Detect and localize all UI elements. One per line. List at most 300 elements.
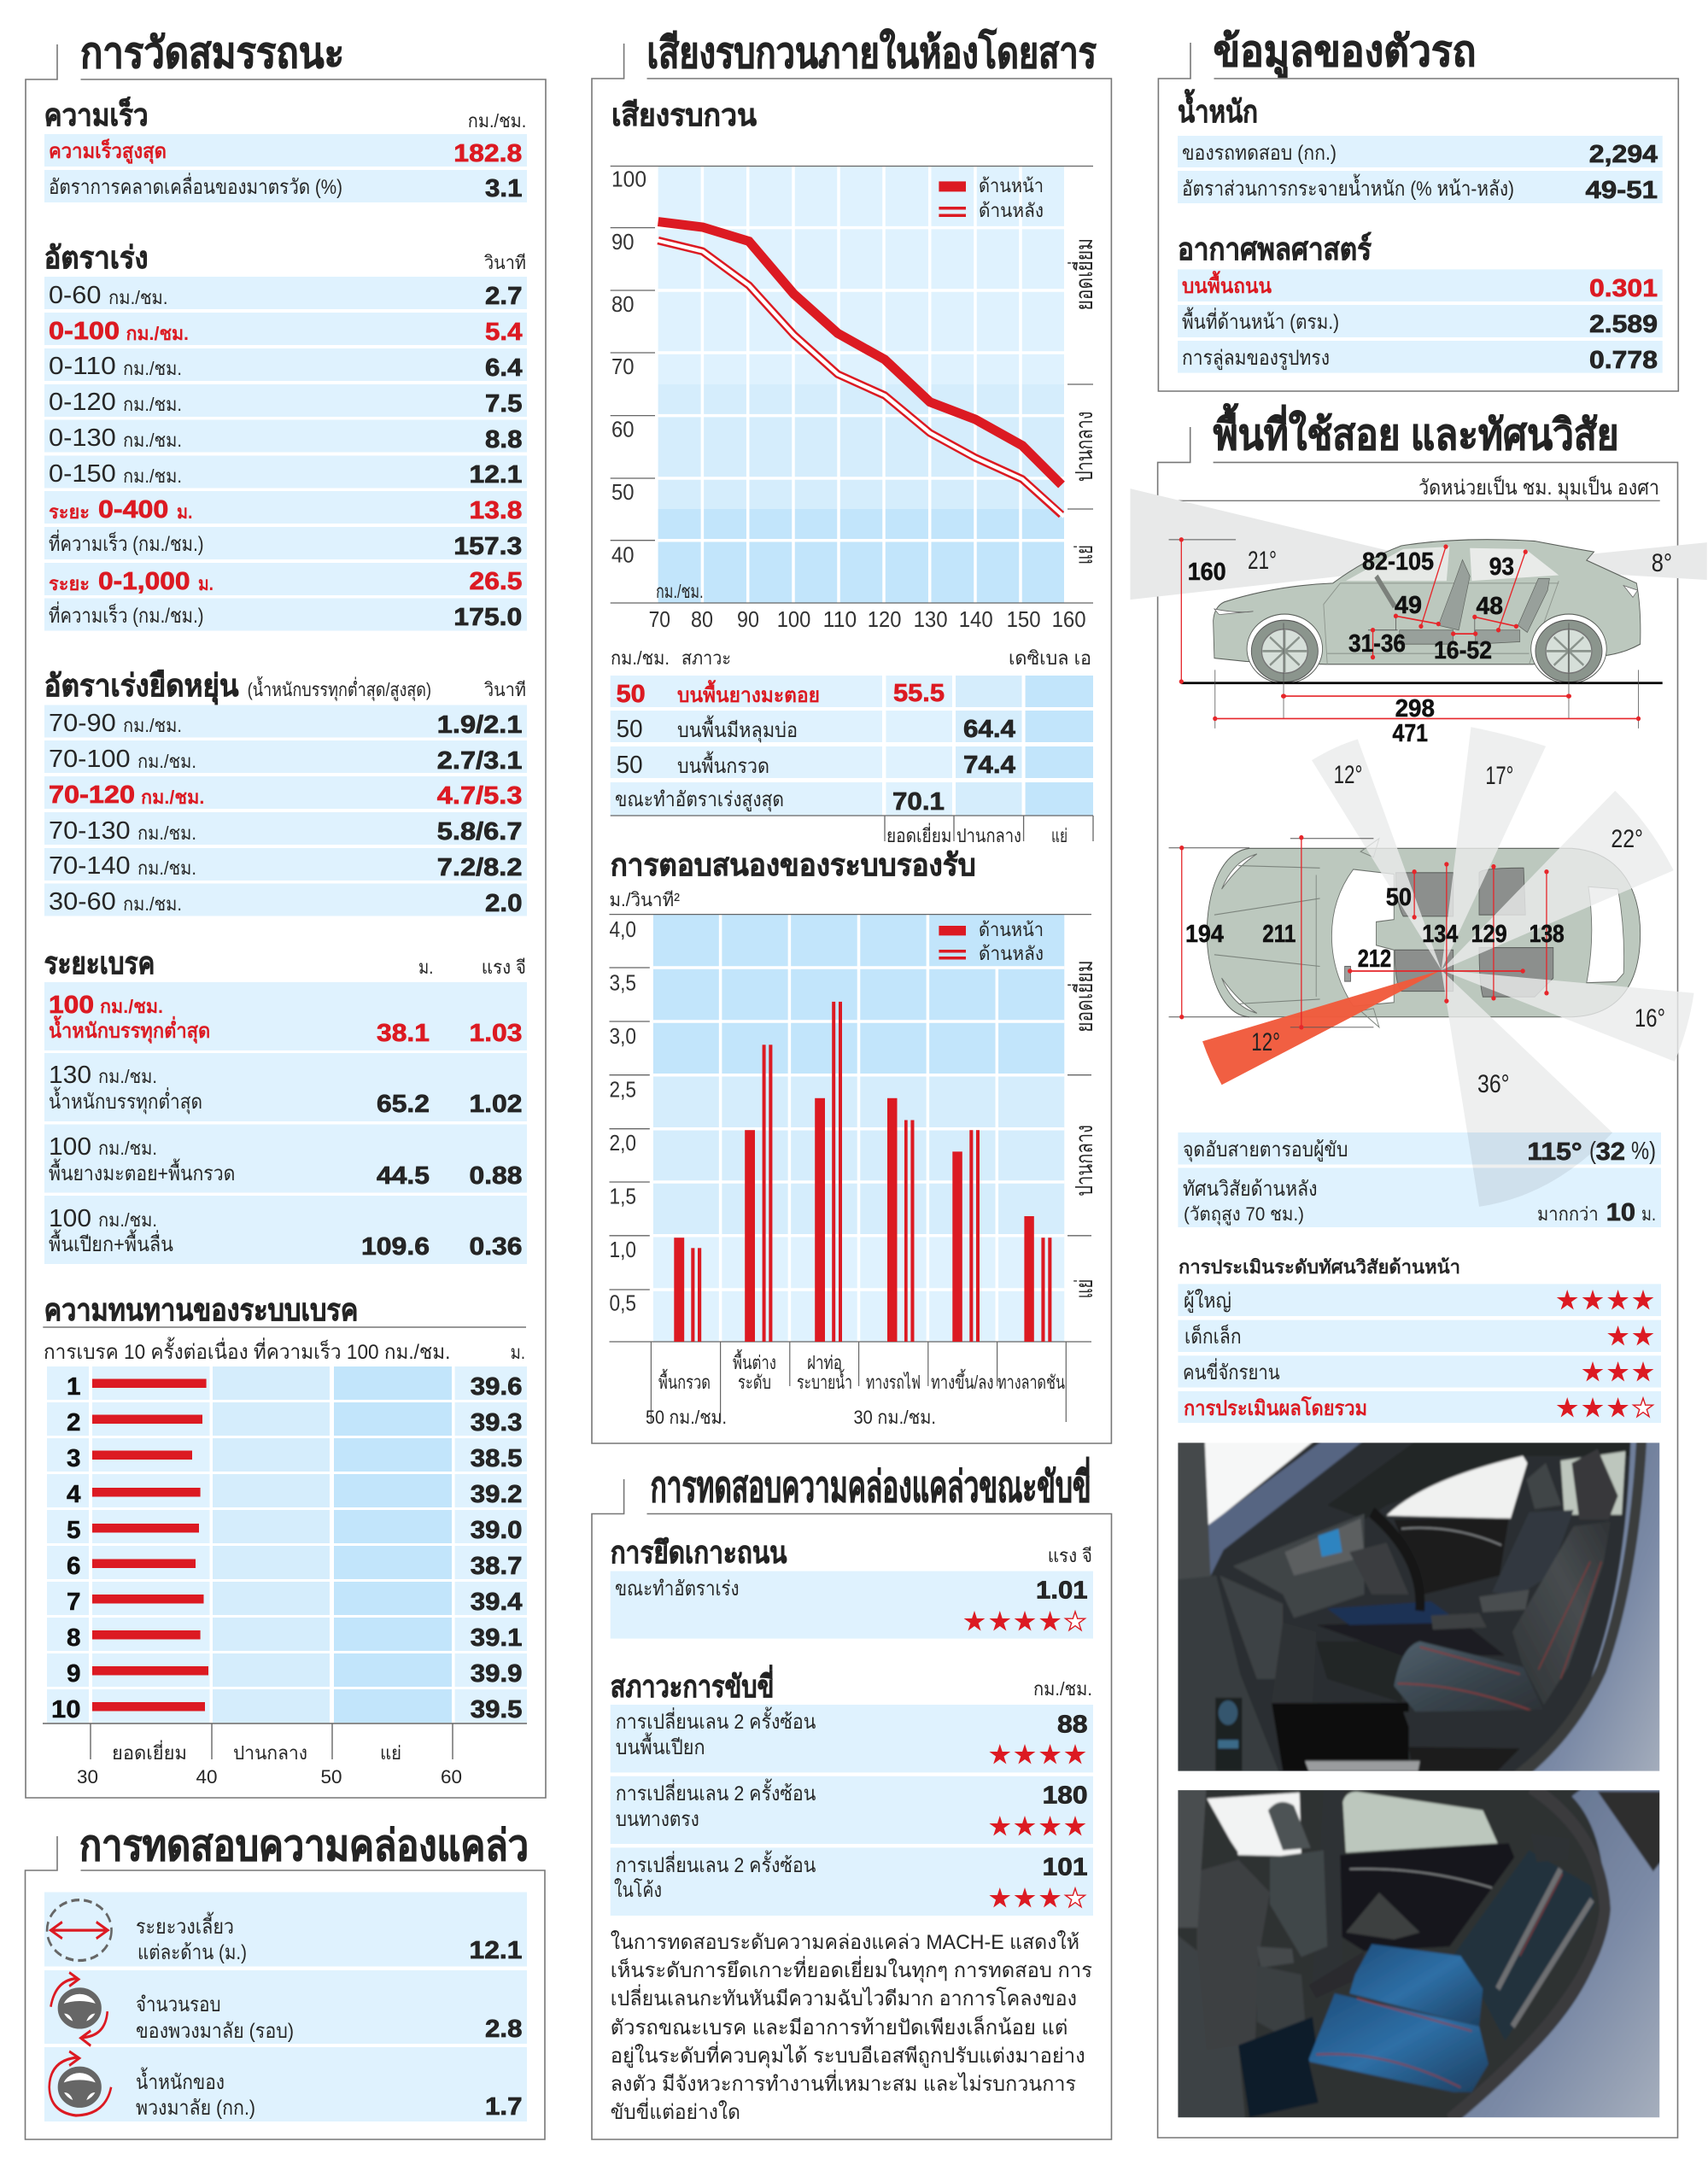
row 1: 1	[67, 1373, 80, 1401]
dimension labels top: 12°	[1334, 761, 1362, 789]
dimension lines top	[1169, 838, 1547, 1027]
x axis labels: กม./ชม.	[656, 581, 704, 602]
dimension labels top: 134	[1422, 921, 1458, 948]
row: test car weight	[1178, 136, 1663, 168]
row: 0-100	[44, 313, 527, 346]
section: flexible acceleration	[44, 668, 527, 917]
row: 100 km/h wet and slippery: กม./ชม.	[98, 1209, 157, 1231]
panel: cabin space and visibility	[1130, 403, 1707, 2138]
y axis labels: 0,5	[610, 1290, 636, 1315]
row: 0-150: 12.1	[470, 461, 523, 489]
rating axis: ยอดเยี่ยม	[886, 822, 951, 846]
row: 30-60: กม./ชม.	[123, 893, 182, 915]
row: blind spot: 115°	[1527, 1138, 1582, 1166]
dimension labels side: 21°	[1248, 547, 1277, 575]
chart axis: 40	[196, 1766, 217, 1788]
row: 100 km/h min load: กม./ชม.	[100, 996, 163, 1017]
y axis labels: 100	[611, 166, 646, 191]
row 10: 10	[51, 1696, 80, 1723]
row: 70-90: 1.9/2.1	[437, 711, 523, 739]
row 2: 2	[67, 1409, 80, 1437]
row: on road: 0.301	[1589, 275, 1658, 302]
icon: steering wheel weight	[50, 2051, 111, 2115]
row: 0-130: กม./ชม.	[123, 430, 182, 451]
dimension dots top	[1179, 835, 1549, 1030]
paragraph: handling summary: ในการทดสอบระดับความคล่องแคล่ว MACH-E แสดงให้	[611, 1930, 1079, 1954]
photo: rear seats	[1178, 1790, 1660, 2118]
heading: front visibility rating: การประเมินระดับทัศนวิสัยด้านหน้า	[1179, 1256, 1460, 1278]
row: 100 km/h wet and slippery	[44, 1196, 527, 1264]
y axis labels: 60	[611, 417, 634, 442]
panel frame	[592, 44, 1111, 1443]
dimension labels side: 49	[1395, 592, 1422, 619]
paragraph: handling summary: ขับขี่แต่อย่างใด	[611, 2098, 740, 2124]
row: 0-1000 m: 26.5	[470, 568, 523, 595]
dimension labels top: 17°	[1485, 762, 1513, 790]
x axis labels: 120	[868, 606, 901, 632]
row: potholes: บนพื้นมีหลุมบ่อ	[677, 715, 798, 743]
x axis categories: 30 กม./ชม.	[854, 1407, 936, 1428]
row: gravel: 50	[617, 752, 643, 779]
row: 70-90: 70-90	[49, 710, 116, 737]
row: full acceleration	[611, 782, 1093, 816]
icon: steering wheel turns	[50, 1972, 108, 2045]
heading: speed: ความเร็ว	[44, 96, 149, 132]
y axis labels	[610, 916, 636, 1315]
row: speed at 400 m	[44, 527, 527, 560]
title: performance: การวัดสมรรถนะ	[80, 29, 344, 77]
row 5: 39.0	[471, 1517, 523, 1544]
dimension labels top: 22°	[1611, 825, 1643, 853]
rating axis	[611, 816, 1093, 846]
row: steering weight: น้ำหนักของ	[136, 2067, 225, 2094]
row 7: 39.4	[471, 1589, 523, 1616]
heading: weight: น้ำหนัก	[1178, 89, 1258, 129]
row: lane change wet	[611, 1705, 1093, 1772]
row: test car weight: 2,294	[1589, 141, 1658, 168]
row: weight distribution	[1178, 171, 1663, 204]
row: 100 km/h min load: 1.03	[470, 1020, 523, 1047]
row: lane change bend: 101	[1043, 1853, 1088, 1881]
row: turning circle: ระยะวงเลี้ยว	[136, 1911, 234, 1939]
paragraph: handling summary: ตัวรถขณะเบรค และมีอาการท้ายปัดเพียงเล็กน้อย แต่	[611, 2015, 1068, 2039]
x axis categories: ทางขึ้น/ลง	[931, 1369, 993, 1393]
sight wedges top	[1312, 727, 1694, 1207]
row: rear visibility	[1183, 1178, 1656, 1226]
row: asphalt: 55.5	[893, 680, 945, 707]
legend: ด้านหน้า	[979, 175, 1044, 196]
row: top speed: ความเร็วสูงสุด	[49, 138, 167, 165]
bars: ramp	[1024, 1216, 1051, 1342]
sight wedges side	[1130, 489, 1707, 600]
chart axis: แย่	[380, 1742, 401, 1764]
x axis categories: พื้นต่าง	[733, 1349, 776, 1373]
title: handling test: การทดสอบความคล่องแคล่วขณะขับขี่	[651, 1457, 1091, 1511]
unit: g force: แรง จี	[1048, 1545, 1092, 1566]
row: lane change straight	[611, 1776, 1093, 1844]
row 10	[47, 1689, 527, 1723]
row: 100 km/h wet and slippery: 0.36	[470, 1233, 523, 1261]
dimension labels side: 93	[1489, 553, 1514, 581]
row: steering weight: พวงมาลัย (กก.)	[136, 2097, 255, 2120]
row: 70-130	[44, 812, 527, 846]
row: 0-120: 0-120	[49, 389, 116, 416]
x axis labels: 150	[1007, 606, 1041, 632]
bar chart: suspension response	[610, 915, 1097, 1428]
x axis labels: 160	[1052, 606, 1086, 632]
chart axis: ปานกลาง	[233, 1742, 307, 1764]
row: 0-1000 m: 0-1,000	[98, 568, 190, 595]
rating labels: แย่	[1071, 545, 1097, 565]
table header: สภาวะ	[681, 647, 731, 669]
paragraph: handling summary	[611, 1930, 1092, 2124]
row: 0-1000 m	[44, 563, 527, 595]
row: 0-120: กม./ชม.	[123, 394, 182, 415]
panel frame	[1158, 427, 1677, 2138]
panel: performance measurements	[26, 29, 546, 1798]
row: 70-140: 7.2/8.2	[437, 854, 523, 881]
panel frame	[26, 44, 546, 1798]
x axis categories: ฝาท่อ	[807, 1352, 842, 1373]
panel: vehicle data	[1158, 27, 1678, 391]
dimension labels side: 48	[1476, 593, 1503, 620]
row: asphalt: บนพื้นยางมะตอย	[677, 679, 820, 707]
row 1: 39.6	[471, 1373, 523, 1401]
row: 70-100: 2.7/3.1	[437, 747, 523, 775]
row: full acceleration: ขณะทำอัตราเร่งสูงสุด	[615, 788, 784, 812]
x axis categories: ระดับ	[738, 1372, 771, 1393]
row: 100 km/h asphalt and gravel: 44.5	[377, 1162, 430, 1190]
row: 70-100: 70-100	[49, 746, 131, 773]
stars: 4	[1557, 1290, 1653, 1310]
row: drag shape: การลู่ลมของรูปทรง	[1182, 347, 1330, 371]
row: 0-1000 m: ระยะ	[49, 573, 90, 594]
bars: gravel	[674, 1238, 701, 1342]
section: brake endurance chart	[43, 1292, 527, 1788]
section: speed	[44, 96, 527, 202]
row: lane change wet: การเปลี่ยนเลน 2 ครั้งซ้อน	[616, 1706, 816, 1734]
y axis labels: 1,0	[610, 1237, 636, 1262]
x axis categories: พื้นกรวด	[658, 1369, 711, 1393]
row: 100 km/h wet and slippery: 100	[49, 1205, 91, 1232]
row: 30-60	[44, 883, 527, 917]
row 8: 8	[67, 1624, 80, 1652]
chart axis: 60	[441, 1766, 462, 1788]
row: 100 km/h wet and slippery: 109.6	[361, 1233, 430, 1261]
heading: acceleration: อัตราเร่ง	[44, 240, 149, 275]
row 6: 38.7	[471, 1553, 523, 1580]
row 4	[47, 1474, 527, 1508]
row: test car weight: ของรถทดสอบ (กก.)	[1182, 142, 1337, 165]
stars: 3 of 4	[989, 1887, 1085, 1908]
row: rear visibility: (วัตถุสูง 70 ชม.)	[1184, 1203, 1304, 1226]
dimension labels side	[1188, 547, 1672, 747]
x axis labels: 140	[959, 606, 993, 632]
table header: เดซิเบล เอ	[1009, 647, 1091, 669]
row: lane change bend	[611, 1847, 1093, 1916]
row: 0-60: 0-60	[49, 282, 101, 309]
heading: driving conditions: สภาวะการขับขี่	[611, 1665, 774, 1704]
row: drag shape: 0.778	[1589, 347, 1658, 374]
row: 0-400 m	[44, 491, 527, 524]
row 8: 39.1	[471, 1624, 523, 1652]
dimension labels top	[1185, 761, 1665, 1098]
rating labels: แย่	[1071, 1279, 1097, 1298]
legend	[939, 175, 1044, 221]
row: overall	[1178, 1391, 1661, 1423]
dimension labels top: 50	[1386, 884, 1412, 911]
row 4: 4	[67, 1481, 80, 1508]
panel: agility test	[26, 1822, 545, 2139]
section: acceleration	[44, 240, 527, 631]
dimension labels side: 31-36	[1348, 630, 1406, 658]
x axis categories: ทางลาดชัน	[997, 1372, 1065, 1393]
row 3	[47, 1438, 527, 1472]
x axis labels: 100	[777, 606, 810, 632]
heading: aerodynamics: อากาศพลศาสตร์	[1178, 231, 1372, 266]
dimension labels top: 212	[1358, 945, 1391, 973]
y axis labels: 1,5	[610, 1184, 636, 1209]
row 5: 5	[67, 1517, 80, 1544]
row: weight distribution: 49-51	[1585, 177, 1658, 204]
row 9: 39.9	[471, 1660, 523, 1688]
stars: 3 of 4	[1557, 1397, 1652, 1418]
row 5	[47, 1510, 527, 1544]
stars: 4 of 5	[964, 1611, 1085, 1631]
row 1	[47, 1366, 527, 1401]
row 6: 6	[67, 1553, 80, 1580]
row: 100 km/h asphalt and gravel: กม./ชม.	[98, 1138, 157, 1159]
y axis labels: 40	[611, 541, 634, 567]
row: 100 km/h min load: 100	[49, 992, 94, 1019]
series: rear	[656, 240, 1064, 517]
row: asphalt: 50	[617, 681, 646, 708]
row: 70-130: 70-130	[49, 817, 131, 845]
row: 0-130	[44, 420, 527, 454]
panel frame	[26, 1836, 545, 2139]
panel: handling test	[592, 1457, 1112, 2139]
row: 0-110	[44, 348, 527, 382]
row: 0-110: กม./ชม.	[123, 358, 182, 379]
row: blind spot: 32	[1596, 1138, 1625, 1166]
car body side	[1214, 540, 1641, 683]
dimension dots side	[1179, 537, 1641, 721]
row: speedometer error	[44, 170, 527, 202]
rating labels: ยอดเยี่ยม	[1068, 238, 1097, 311]
row: 70-130: 5.8/6.7	[437, 818, 523, 846]
row 2	[47, 1402, 527, 1437]
row: 0-1000 m: ม.	[198, 573, 214, 594]
row: lane change straight: การเปลี่ยนเลน 2 ครั้งซ้อน	[616, 1778, 816, 1805]
dimension labels side: 16-52	[1434, 637, 1492, 664]
legend: ด้านหน้า	[979, 919, 1044, 940]
rating labels: ยอดเยี่ยม	[1068, 960, 1097, 1033]
row: overall: การประเมินผลโดยรวม	[1184, 1396, 1367, 1420]
heading: flexible acceleration: อัตราเร่งยืดหยุ่น	[44, 668, 239, 705]
row: 130 km/h min load	[44, 1053, 527, 1121]
dimension labels side: 471	[1392, 720, 1428, 747]
x axis labels: 90	[737, 606, 759, 632]
row: 70-100: กม./ชม.	[137, 751, 196, 772]
chart axis: 30	[77, 1766, 98, 1788]
rating axis: ปานกลาง	[956, 825, 1021, 846]
row: 30-60: 30-60	[49, 888, 116, 916]
row: adults: ผู้ใหญ่	[1184, 1289, 1231, 1314]
dimension labels top: 12°	[1251, 1028, 1280, 1056]
row: 0-130: 0-130	[49, 424, 116, 452]
row: 100 km/h asphalt and gravel: พื้นยางมะตอย+พื้นกรวด	[49, 1158, 235, 1185]
y axis labels: 3,0	[610, 1023, 636, 1049]
row: lane change straight: บนทางตรง	[616, 1808, 699, 1831]
y axis labels: 50	[611, 479, 634, 505]
row: asphalt	[611, 676, 1093, 708]
y axis labels	[611, 166, 646, 567]
row: frontal area: 2.589	[1589, 311, 1658, 338]
dimension labels top: 138	[1530, 921, 1565, 948]
row: 130 km/h min load: กม./ชม.	[98, 1066, 157, 1087]
rating labels: ปานกลาง	[1071, 412, 1097, 482]
row: 0-400 m: ม.	[177, 501, 193, 523]
row: 100 km/h min load: 38.1	[377, 1020, 430, 1047]
row: steering turns	[44, 1970, 527, 2045]
unit: m/s2: ม./วินาที²	[610, 889, 680, 910]
heading: grip: การยึดเกาะถนน	[611, 1535, 787, 1570]
row: blind spot: (	[1589, 1138, 1596, 1165]
dimension labels top: 36°	[1477, 1070, 1510, 1098]
legend: ด้านหลัง	[979, 943, 1044, 964]
section: braking distance	[44, 945, 527, 1264]
dimension labels top: 194	[1185, 921, 1224, 948]
bars: railway crossing	[887, 1098, 914, 1342]
row: weight distribution: อัตราส่วนการกระจายน้ำหนัก (% หน้า-หลัง)	[1182, 173, 1514, 201]
diagram: car top view	[1169, 727, 1694, 1207]
row: cyclists: คนขี่จักรยาน	[1183, 1358, 1280, 1384]
paragraph: handling summary: อยู่ในระดับที่ควบคุมได้ ระบบอีเอสพีถูกปรับแต่งมาอย่าง	[611, 2041, 1085, 2069]
y axis labels: 2,5	[610, 1076, 636, 1102]
row: steering turns: 2.8	[485, 2016, 523, 2043]
row: 130 km/h min load: 65.2	[377, 1091, 430, 1118]
row: rear visibility: 10	[1606, 1199, 1635, 1226]
row: 0-150: 0-150	[49, 460, 116, 488]
heading: brake endurance: ความทนทานของระบบเบรค	[44, 1292, 358, 1327]
legend: ด้านหลัง	[979, 200, 1044, 221]
ground line	[1181, 681, 1663, 685]
unit: g force: แรง จี	[482, 957, 526, 978]
row: turning circle: 12.1	[470, 1937, 523, 1964]
row: 70-120	[44, 776, 527, 810]
dimension labels top: 211	[1262, 921, 1296, 948]
row: turning circle	[44, 1893, 527, 1966]
row: 100 km/h min load	[44, 982, 527, 1050]
row: 70-140	[44, 848, 527, 881]
row: speed at 400 m: 157.3	[453, 533, 522, 560]
row: 70-130: กม./ชม.	[137, 822, 196, 844]
series: front	[658, 222, 1062, 485]
row: 0-120: 7.5	[485, 390, 523, 418]
paragraph: handling summary: ลงตัว มีจังหวะการทำงานที่เหมาะสม และไม่รบกวนการ	[611, 2069, 1076, 2096]
row: 30-60: 2.0	[485, 890, 523, 917]
note: min/max load: (น้ำหนักบรรทุกต่ำสุด/สูงสุด)	[248, 676, 431, 701]
x axis labels: 130	[914, 606, 948, 632]
stars: 3	[1582, 1361, 1653, 1382]
row 3: 3	[67, 1445, 80, 1472]
row: potholes: 64.4	[963, 716, 1015, 743]
icon: turning circle	[47, 1900, 112, 1961]
dimension labels top: 16°	[1635, 1004, 1665, 1033]
x axis categories: ระบายน้ำ	[797, 1369, 852, 1393]
unit: seconds: วินาที	[483, 252, 526, 273]
title: cabin space and visibility: พื้นที่ใช้สอย และทัศนวิสัย	[1214, 403, 1619, 459]
row: 0-110: 0-110	[49, 353, 116, 380]
photo: front seats	[1178, 1442, 1660, 1771]
panel frame	[592, 1479, 1112, 2139]
chart axis: ยอดเยี่ยม	[112, 1740, 187, 1764]
row: turning circle: แต่ละด้าน (ม.)	[137, 1941, 247, 1964]
x axis categories: ทางรถไฟ	[866, 1372, 921, 1393]
row: drag shape	[1178, 341, 1663, 374]
row: 0-150: กม./ชม.	[123, 465, 182, 487]
row 2: 39.3	[471, 1409, 523, 1437]
row 7	[47, 1582, 527, 1616]
y axis labels: 2,0	[610, 1130, 636, 1156]
line chart: noise by speed	[611, 166, 1097, 632]
row: 100 km/h wet and slippery: พื้นเปียก+พื้นลื่น	[49, 1229, 173, 1256]
bars: up and down	[952, 1130, 980, 1342]
row: lane change bend: ในโค้ง	[614, 1878, 662, 1902]
table: noise by condition	[611, 647, 1093, 846]
row: 70-90: กม./ชม.	[123, 715, 182, 736]
x axis categories	[646, 1342, 1066, 1428]
row: 70-90	[44, 705, 527, 739]
diagram: car side view	[1130, 489, 1707, 747]
row: on road	[1178, 269, 1663, 302]
row: children: เด็กเล็ก	[1184, 1324, 1242, 1349]
heading: noise: เสียงรบกวน	[611, 97, 757, 132]
row: lane change wet: บนพื้นเปียก	[616, 1732, 705, 1759]
row: 70-100	[44, 740, 527, 775]
unit: km/h: กม./ชม.	[1033, 1678, 1092, 1700]
row: full acceleration: 70.1	[892, 788, 945, 816]
row: 100 km/h asphalt and gravel: 100	[49, 1133, 91, 1161]
row: 70-120: 4.7/5.3	[437, 782, 523, 810]
row: rear visibility: ทัศนวิสัยด้านหลัง	[1183, 1178, 1317, 1201]
red blind-spot wedge	[1202, 970, 1442, 1085]
row: 130 km/h min load: น้ำหนักบรรทุกต่ำสุด	[49, 1086, 202, 1115]
row: frontal area	[1178, 305, 1663, 338]
row: on road: บนพื้นถนน	[1182, 270, 1272, 298]
y axis labels: 90	[611, 229, 634, 255]
bars: drain cover	[815, 1002, 842, 1342]
stars: 4	[989, 1816, 1085, 1836]
dimension labels side: 8°	[1652, 549, 1672, 577]
chart axis	[43, 1723, 527, 1788]
row: steering weight: 1.7	[485, 2093, 523, 2121]
row: lane change wet: 88	[1057, 1712, 1088, 1739]
row: 0-60	[44, 277, 527, 310]
row: speed at 400 m: ที่ความเร็ว (กม./ชม.)	[49, 530, 203, 556]
row: speedometer error: 3.1	[485, 175, 523, 202]
row: blind spot: จุดอับสายตารอบผู้ขับ	[1183, 1138, 1348, 1162]
row: top speed	[44, 134, 527, 167]
row: potholes	[611, 711, 1093, 743]
row: 0-100: 5.4	[485, 319, 523, 346]
row: steering turns: ของพวงมาลัย (รอบ)	[136, 2020, 294, 2043]
table: blind spot and rear visibility	[1178, 1132, 1661, 1227]
row: 100 km/h asphalt and gravel	[44, 1124, 527, 1192]
panel frame	[1158, 43, 1678, 391]
paragraph: handling summary: เห็นระดับการยึดเกาะที่ยอดเยี่ยมในทุกๆ การทดสอบ การ	[611, 1956, 1092, 1983]
note: units: วัดหน่วยเป็น ชม. มุมเป็น องศา	[1418, 475, 1659, 500]
